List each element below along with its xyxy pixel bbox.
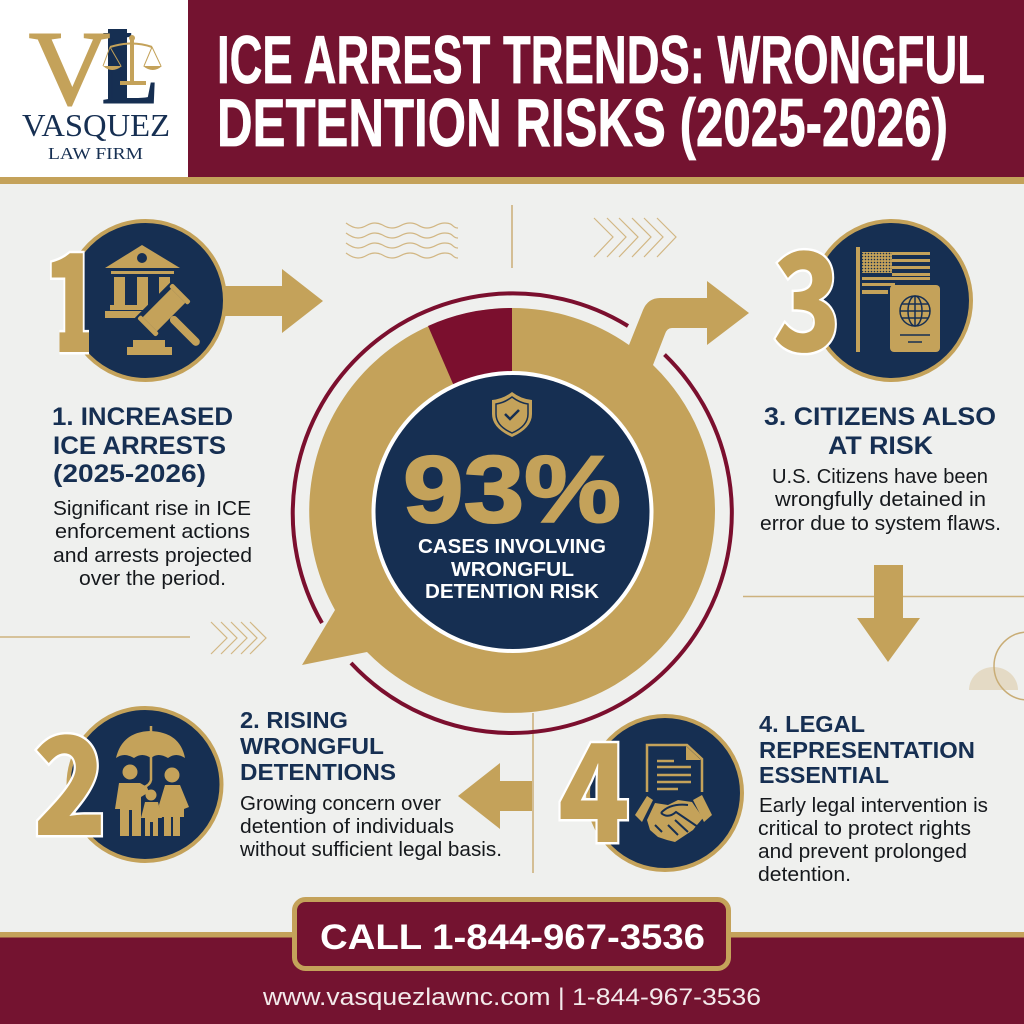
step 4 text — [758, 794, 988, 886]
step 4 text: and prevent prolonged — [758, 840, 967, 863]
step 1 text: enforcement actions — [55, 520, 250, 543]
step 2 heading: WRONGFUL — [240, 733, 384, 759]
badge circle — [812, 221, 971, 380]
badge circle — [588, 716, 742, 870]
numeral 4: 4 — [558, 685, 630, 882]
step 4 heading: REPRESENTATION — [759, 737, 975, 763]
step 3 text — [760, 465, 1001, 535]
icon: flag and passport — [856, 247, 940, 352]
step 3 text: error due to system flaws. — [760, 512, 1001, 535]
header band — [0, 0, 1024, 184]
step 4 heading: ESSENTIAL — [759, 762, 889, 788]
step 3 heading — [764, 403, 996, 460]
logo name: VASQUEZ — [22, 107, 170, 143]
stat caption: CASES INVOLVING — [418, 535, 606, 558]
maroon slice — [428, 308, 512, 400]
step 2 text: Growing concern over — [240, 792, 441, 815]
step 4 text: Early legal intervention is — [759, 794, 988, 817]
step 4 heading — [759, 711, 975, 788]
step 3 heading: AT RISK — [828, 432, 933, 460]
step 1 text: and arrests projected — [53, 544, 252, 567]
badge circle — [66, 221, 225, 380]
logo monogram L stem — [108, 29, 127, 102]
step 2 text — [239, 792, 502, 861]
step 2 heading — [240, 707, 396, 785]
step 4 badge — [558, 685, 742, 882]
center donut chart: 93% — [293, 281, 749, 733]
logo monogram L: L — [101, 9, 160, 126]
step 1 heading: ICE ARRESTS — [53, 432, 226, 460]
stat caption — [418, 535, 606, 603]
arrow: step 3 down — [857, 565, 920, 662]
step 4 text: critical to protect rights — [758, 817, 971, 840]
stat caption: DETENTION RISK — [425, 580, 599, 603]
decorative lines and patterns — [0, 205, 1024, 873]
step 2 text: without sufficient legal basis. — [239, 838, 502, 861]
step 1 text — [53, 497, 252, 590]
step 3 text: wrongfully detained in — [774, 488, 986, 511]
stat caption: WRONGFUL — [451, 558, 574, 581]
logo monogram V: V — [29, 10, 110, 127]
call to action button — [294, 900, 728, 968]
step 1 heading: 1. INCREASED — [52, 403, 233, 431]
step 1 heading — [52, 403, 233, 488]
step 2 badge — [33, 678, 222, 875]
icon: shield with check — [492, 392, 532, 437]
call to action button: CALL 1-844-967-3536 — [320, 918, 705, 957]
gold donut with tail and arrow — [302, 281, 749, 713]
step 3 heading: 3. CITIZENS ALSO — [764, 403, 996, 431]
step 2 heading: DETENTIONS — [240, 759, 396, 785]
step 2 heading: 2. RISING — [240, 707, 348, 733]
numeral 1: 1 — [42, 195, 102, 392]
numeral 2: 2 — [33, 678, 107, 875]
icon: family under umbrella — [115, 726, 189, 836]
logo subtitle: LAW FIRM — [48, 144, 143, 163]
footer band — [0, 932, 1024, 1024]
arrow: step 4 to 2 — [458, 763, 532, 829]
footer contact line: www.vasquezlawnc.com | 1-844-967-3536 — [262, 984, 761, 1011]
icon: courthouse and gavel — [105, 245, 217, 363]
step 1 heading: (2025-2026) — [53, 460, 206, 488]
step 2 text: detention of individuals — [240, 815, 454, 838]
logo: Vasquez Law Firm — [22, 9, 170, 163]
stat value: 93% — [403, 437, 621, 543]
title — [217, 22, 985, 161]
step 1 badge — [50, 219, 226, 382]
arrow: step 1 to center — [222, 269, 323, 333]
badge circle — [68, 708, 222, 861]
icon: document and handshake — [635, 745, 712, 842]
step 1 text: Significant rise in ICE — [53, 497, 251, 520]
numeral 3: 3 — [773, 194, 841, 391]
step 1 text: over the period. — [79, 567, 226, 590]
step 3 text: U.S. Citizens have been — [772, 465, 988, 488]
center circle — [372, 371, 654, 653]
step 4 heading: 4. LEGAL — [759, 711, 865, 737]
step 3 badge — [773, 194, 971, 391]
outer maroon ring — [293, 293, 732, 733]
step 4 text: detention. — [758, 863, 851, 886]
logo scales of justice — [103, 35, 162, 85]
